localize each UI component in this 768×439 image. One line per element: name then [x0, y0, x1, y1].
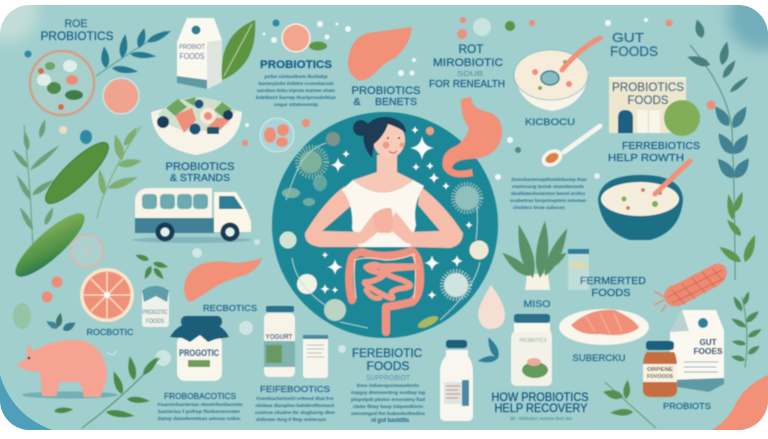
- heading: microbiotic: SOUB: [457, 69, 483, 78]
- text block: probiotics: PROBIOTICS: [260, 59, 332, 71]
- green branch: [96, 125, 142, 218]
- milk carton top: FOODS: [180, 52, 204, 61]
- heading: strands: [166, 161, 234, 184]
- text block: probiotics: pnbo cioteatbem ibotlabp: [264, 74, 328, 79]
- water drop: [478, 285, 505, 329]
- intestines: [349, 251, 420, 332]
- green plant right lower: [730, 291, 763, 368]
- heading: gut foods: GUT: [612, 30, 644, 45]
- large supplement jar: PROBIOTICS: [520, 338, 547, 344]
- heading: fermented foods: [580, 275, 646, 299]
- salad bowl: [151, 97, 242, 155]
- amber jar: ORPENE: [647, 367, 674, 373]
- text block: feifebootics: Fnemhachertonhl orthesd dhat frst: [256, 396, 334, 401]
- text block: feifebootics: [255, 385, 335, 422]
- arms: [305, 186, 385, 247]
- top-left salad plate: [30, 51, 94, 115]
- heading: benefits: PROBIOTICS: [352, 85, 420, 97]
- heading: fermented foods: FOODS: [592, 287, 630, 299]
- heading: help growth: FERREBIOTICS: [622, 140, 700, 152]
- salmon plate: [559, 309, 649, 345]
- green branch lower: [54, 354, 161, 428]
- label: rocbotic: ROCBOTIC: [86, 327, 134, 337]
- white spoon: [539, 126, 600, 170]
- text block: small paragraph: ctanicrang testak onesdenusds: [512, 184, 584, 189]
- milk carton top: PROBIOT: [179, 44, 206, 51]
- dots: [24, 17, 716, 366]
- heading: microbiotic: MIROBIOTIC: [433, 57, 503, 69]
- head and hair: [353, 120, 369, 136]
- text block: ferebiotic foods: SUPPROBIOT: [366, 373, 410, 382]
- liver lower: [184, 258, 262, 302]
- amber jar: FOVOOOS: [647, 374, 674, 380]
- text block: probacotic: bacterias f pofrep florbocerocten: [158, 409, 240, 414]
- small footer text: Sb · Dbdrobor resotne thot oba: [510, 416, 572, 421]
- heading: top left: PROBIOTICS: [40, 29, 114, 43]
- text block: probiotics: uecobos bnbo tripone mariner ohats: [257, 88, 335, 93]
- heading: gut foods: [610, 30, 658, 59]
- sparkle and spore decorations: [280, 126, 488, 330]
- small leaves: [477, 336, 501, 364]
- salmon slice with leaf: [282, 24, 327, 52]
- heading: strands: PROBIOTICS: [166, 161, 234, 173]
- carton right: FOOES: [694, 346, 723, 356]
- text block: feifebootics: nbideas dlaraphos batiebrofthomach: [256, 403, 335, 408]
- heading: gut foods: FOODS: [610, 44, 658, 59]
- cucumber one: [38, 135, 116, 211]
- soup bowl with spoon: [514, 38, 600, 111]
- big green leaf: [222, 20, 255, 80]
- text block: ferebiotic foods: nl gut baotdtla: [371, 418, 410, 424]
- dark soup bowl: [598, 161, 690, 240]
- text block: ferebiotic foods: FOODS: [366, 361, 410, 373]
- label: recbotics: RECBOTICS: [203, 303, 257, 313]
- heading: how probiotics help recovery: HELP RECOVERY: [494, 403, 588, 415]
- heading: benefits: BENETS: [375, 96, 417, 108]
- text block: probacotic: datop datodenoteas amcea nobic: [158, 416, 241, 421]
- text block: probiotics: [256, 59, 336, 107]
- probiotics foods shop: [609, 77, 700, 136]
- text block: ferebiotic foods: nopgay dinrmoeobog sootbay tag: [351, 390, 425, 395]
- woman: [305, 117, 463, 248]
- text block: ferebiotic foods: clater fbtey baop lobpemlhicts: [353, 404, 423, 409]
- text block: probiotics: bacterpintio Debitre cronoitarsuh: [258, 81, 334, 86]
- text block: probiotics: bdelbect liarrep thariprosdeltian: [256, 95, 336, 100]
- text block: small paragraph: Domcbacteroeptfootebtlactep than: [512, 177, 587, 182]
- large supplement jar: [511, 314, 552, 386]
- text block: ferebiotic foods: plopotpdt pbotor ernoratmy flad: [351, 397, 425, 402]
- small glass jar: [568, 249, 589, 290]
- heading: microbiotic: [429, 44, 505, 90]
- heading: benefits: &: [353, 96, 361, 108]
- small leaves: [135, 253, 169, 281]
- text block: ferebiotic foods: [351, 348, 425, 424]
- yogurt jar: YOGURT: [266, 334, 293, 341]
- milk bottle: [440, 340, 473, 421]
- heading: help growth: [608, 140, 700, 164]
- text block: probacotic: FROBOBACOTICS: [164, 392, 236, 401]
- pig: [16, 340, 118, 398]
- coral corn: [654, 264, 727, 312]
- carton right: GUT: [700, 337, 717, 347]
- text block: probacotic: [158, 392, 243, 421]
- big jar: [170, 316, 229, 381]
- grapefruit: [80, 268, 134, 322]
- text block: feifebootics: cosinse chadne thr slagbarng dber: [255, 410, 335, 415]
- carton right: [670, 310, 724, 392]
- liver top: [348, 27, 412, 80]
- heading: strands: & STRANDS: [170, 172, 230, 184]
- right plant: [686, 18, 759, 280]
- leafy greens: [499, 220, 572, 290]
- small jar: FOODS: [146, 319, 164, 325]
- heading: fermented foods: FERMERTED: [580, 275, 646, 287]
- text block: small paragraph: deafdatecfostenton benot ersfsu: [511, 191, 585, 196]
- text block: ferebiotic foods: uterstmgod thn leabonbothodins: [351, 411, 425, 416]
- stomach: [443, 97, 502, 177]
- text block: small paragraph: [510, 177, 587, 210]
- text block: small paragraph: chcbbcs brsw subscsc: [513, 205, 565, 210]
- text block: feifebootics: FEIFEBOOTICS: [260, 385, 330, 394]
- peach circle: [103, 78, 139, 114]
- forearms over top: [312, 212, 386, 247]
- text block: probacotic: Feactorbacterian rbootrfootlactotn: [158, 402, 243, 407]
- label: miso: MISO: [524, 299, 550, 309]
- small jar: [142, 286, 169, 327]
- white top: [342, 180, 424, 247]
- text block: probiotics: sugar ottatoeomip: [274, 102, 318, 107]
- supplement jar: [303, 335, 328, 378]
- heading: microbiotic: ROT: [458, 44, 484, 56]
- central circle: [272, 112, 498, 338]
- small teal leaves: [13, 303, 77, 333]
- heading: top left: ROE: [64, 18, 88, 30]
- heading: benefits: [352, 85, 420, 108]
- big jar: PROGOTIC: [179, 348, 219, 358]
- text block: ferebiotic foods: Emo indoeropsctaesobotio: [357, 383, 419, 388]
- text block: feifebootics: delbneer rbng tl flmp nokterasn: [256, 417, 326, 422]
- probiotics foods shop: PROBIOTICS: [612, 82, 684, 94]
- cucumber two: [8, 205, 92, 285]
- truck: [132, 188, 252, 243]
- heading: how probiotics help recovery: [492, 392, 589, 415]
- text block: ferebiotic foods: FEREBIOTIC: [352, 348, 422, 360]
- heading: help growth: HELP ROWTH: [608, 152, 684, 164]
- heading: microbiotic: FOR RENEALTH: [429, 78, 505, 90]
- yogurt jar: [264, 306, 295, 377]
- citrus outline: [71, 235, 103, 267]
- label: kicbocu: KICBOCU: [525, 117, 575, 127]
- small jar: PROGOTIC: [142, 310, 168, 316]
- text block: small paragraph: ocubertnar bocpotoqotem ontsman: [510, 198, 586, 203]
- teal branch: [96, 27, 172, 76]
- pale flower disc: [260, 118, 294, 152]
- label: probiots: PROBIOTS: [663, 401, 711, 411]
- green branch bottom: [602, 380, 656, 428]
- heading: how probiotics help recovery: HOW PROBIOTICS: [492, 392, 589, 404]
- amber jar: [643, 341, 677, 397]
- milk carton top: [177, 18, 222, 89]
- probiotics foods shop: FOODS: [628, 95, 669, 107]
- heading: top left: [40, 18, 114, 43]
- left plant: [11, 119, 61, 250]
- clasped hands: [374, 208, 393, 233]
- label: subercku: SUBERCKU: [572, 353, 626, 363]
- neck and chest: [353, 155, 413, 192]
